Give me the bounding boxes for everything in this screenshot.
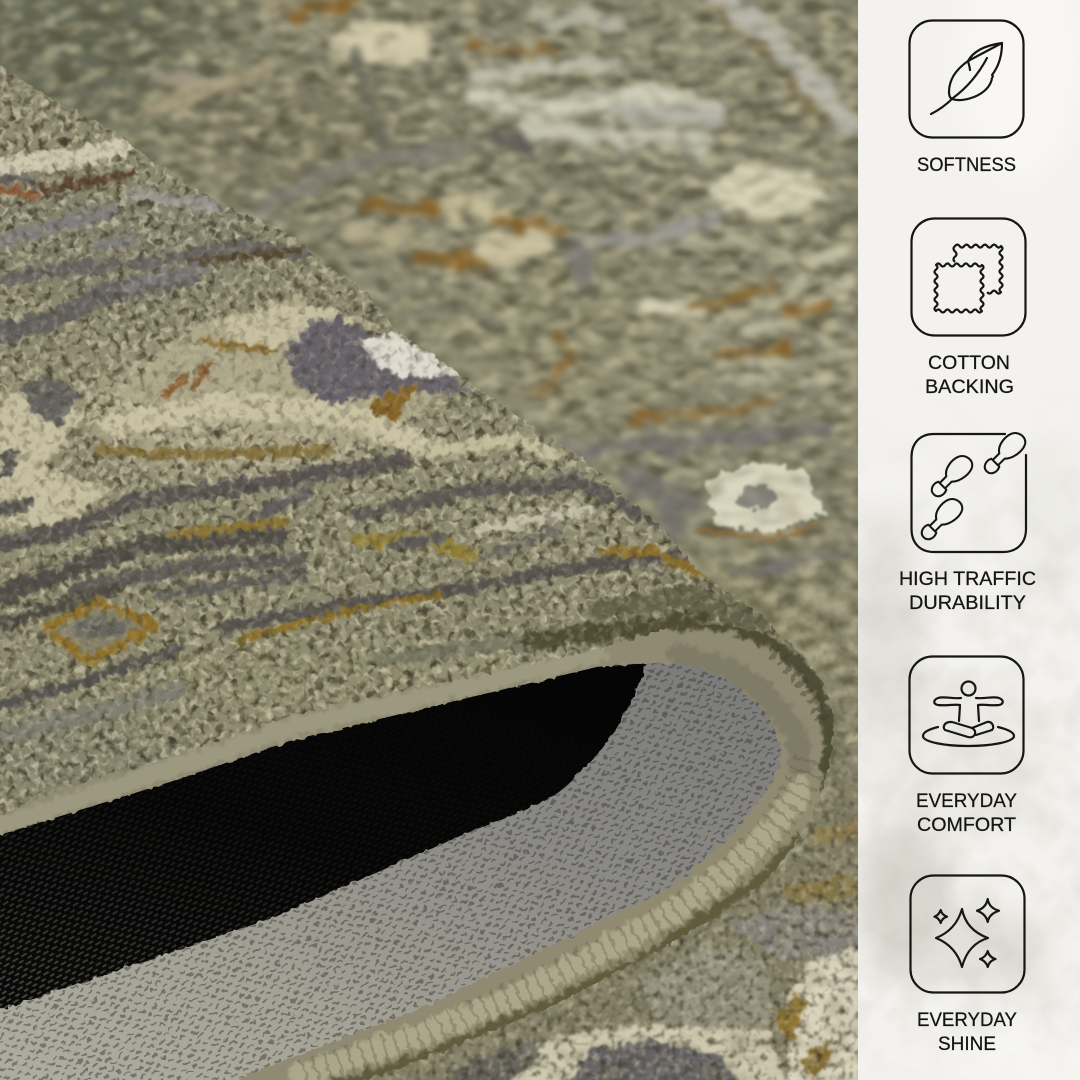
label: everyday comfort: EVERYDAY [916, 791, 1017, 812]
feature: everyday comfort [910, 656, 1024, 836]
icon: sparkles [910, 876, 1024, 992]
label: everyday shine: EVERYDAY [917, 1010, 1017, 1031]
label: cotton backing: COTTON [928, 353, 1010, 374]
grey rug underside [0, 650, 800, 1080]
feature: softness [910, 20, 1024, 176]
blurred motif strokes [114, 0, 854, 654]
label: cotton backing [925, 353, 1014, 398]
cream medallion [700, 462, 825, 540]
icon: footprints [912, 428, 1029, 552]
label: softness: SOFTNESS [917, 155, 1016, 176]
label: everyday comfort [916, 791, 1017, 836]
rug edge lip [0, 620, 840, 1080]
rolled rug top surface [0, 60, 840, 840]
feature: cotton backing [912, 218, 1026, 398]
icon: feather [910, 20, 1024, 138]
label: high traffic durability: HIGH TRAFFIC [899, 569, 1036, 590]
panel: right sidebar [850, 0, 1080, 1080]
rope fringe [300, 760, 810, 1078]
label: high traffic durability [899, 569, 1036, 614]
label: everyday shine: SHINE [938, 1034, 996, 1055]
label: cotton backing: BACKING [925, 377, 1014, 398]
sidebar background [850, 0, 1080, 1080]
lower right rug corner [340, 720, 870, 1080]
dark interior of roll [0, 660, 660, 1020]
feature: everyday shine [910, 876, 1024, 1055]
icon: seated meditation figure [910, 656, 1024, 774]
label: everyday shine [917, 1010, 1017, 1055]
pile pattern strokes [0, 140, 760, 735]
label: high traffic durability: DURABILITY [909, 593, 1026, 614]
feature: high traffic durability [899, 428, 1036, 614]
icon: fabric swatches [912, 218, 1026, 336]
label: everyday comfort: COMFORT [917, 815, 1016, 836]
lip shading [0, 623, 830, 1080]
